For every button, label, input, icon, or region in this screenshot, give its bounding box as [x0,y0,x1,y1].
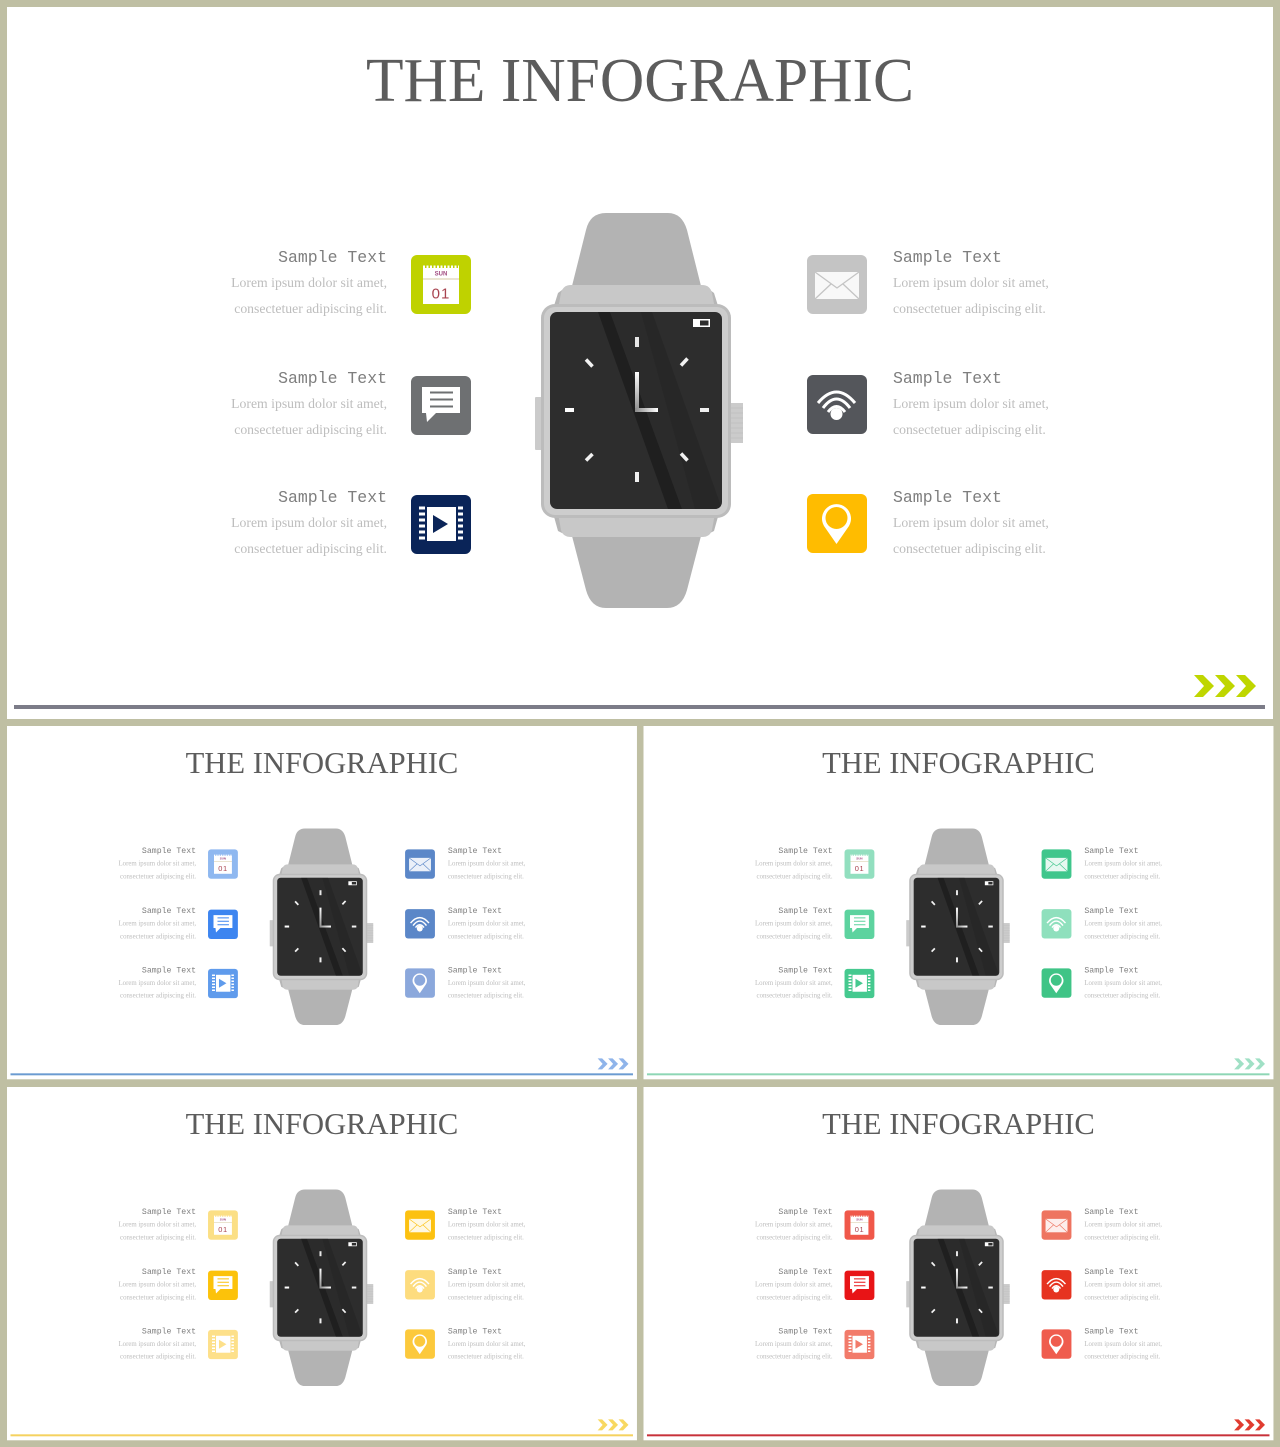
text block: right 1: consectetuer adipiscing elit. [448,873,524,880]
title: THE INFOGRAPHIC [822,746,1095,780]
text block: left 2: Sample Text [142,906,196,916]
icon: location pin [1042,968,1071,998]
text block: right 1 [1084,1207,1162,1241]
text block: right 2: Lorem ipsum dolor sit amet, [448,1282,526,1289]
icon: calendar: 01 [855,1225,864,1234]
icon: video [208,1330,238,1359]
text block: left 1: Lorem ipsum dolor sit amet, [119,860,196,867]
text block: right 2 [1084,906,1162,940]
smartwatch [270,1190,373,1386]
text block: left 2: Sample Text [278,369,387,388]
text block: right 2: Lorem ipsum dolor sit amet, [1084,921,1162,928]
text block: left 3: Lorem ipsum dolor sit amet, [119,1341,196,1348]
icon: video [208,969,238,998]
title: THE INFOGRAPHIC [186,746,458,780]
smartwatch [270,829,373,1025]
text block: right 2: consectetuer adipiscing elit. [448,1294,524,1301]
text block: left 1: Lorem ipsum dolor sit amet, [755,860,833,867]
text block: left 1: consectetuer adipiscing elit. [120,1234,196,1241]
text block: right 2 [448,1267,526,1301]
text block: right 3: Sample Text [893,488,1002,507]
panel: blue variant [7,726,637,1079]
text block: right 3 [893,488,1049,556]
text block: left 2: consectetuer adipiscing elit. [234,422,387,437]
text block: right 2: consectetuer adipiscing elit. [893,422,1046,437]
icon: speech bubble [845,910,874,939]
text block: left 3 [231,488,387,556]
text block: right 3: consectetuer adipiscing elit. [448,993,524,1000]
text block: left 2: Lorem ipsum dolor sit amet, [755,1282,833,1289]
arrows: chevrons [1194,675,1256,697]
icon: calendar: 01 [855,864,864,873]
text block: left 2: Sample Text [142,1267,196,1277]
arrows: chevrons [1234,1419,1265,1430]
text block: left 3 [119,1326,196,1361]
text block: right 2: Sample Text [893,369,1002,388]
text block: left 1: Sample Text [142,846,196,856]
text block: right 3: consectetuer adipiscing elit. [893,541,1046,556]
text block: right 3: Sample Text [1084,1326,1139,1336]
text block: left 1 [231,248,387,316]
icon: video [845,1330,874,1359]
text block: right 3 [448,965,526,1000]
text block: right 1: Lorem ipsum dolor sit amet, [893,275,1049,290]
text block: left 1: consectetuer adipiscing elit. [757,1234,833,1241]
text block: left 2 [119,1267,196,1301]
text block: right 2: Lorem ipsum dolor sit amet, [893,396,1049,411]
icon: wifi [1042,909,1071,938]
text block: left 2: consectetuer adipiscing elit. [120,933,196,940]
text block: right 2 [448,906,526,940]
text block: left 3: Lorem ipsum dolor sit amet, [119,980,196,987]
icon: location pin [405,1329,435,1359]
title: THE INFOGRAPHIC [366,47,914,115]
text block: left 1: Sample Text [778,1207,833,1217]
text block: left 3: consectetuer adipiscing elit. [757,993,833,1000]
text block: right 1 [1084,846,1162,880]
text block: left 1: Sample Text [142,1207,196,1217]
text block: right 1 [893,248,1049,316]
text block: right 2: Lorem ipsum dolor sit amet, [1084,1282,1162,1289]
text block: left 2: consectetuer adipiscing elit. [757,1294,833,1301]
text block: right 3: Sample Text [448,1326,502,1336]
arrows: chevrons [598,1419,629,1430]
icon: envelope [807,255,867,314]
text block: left 1 [755,1207,833,1241]
icon: calendar [845,1210,874,1240]
text block: left 2: Lorem ipsum dolor sit amet, [119,1282,196,1289]
text block: left 1 [119,1207,196,1241]
text block: left 2: Sample Text [778,906,833,916]
text block: left 1: consectetuer adipiscing elit. [234,301,387,316]
text block: right 1: consectetuer adipiscing elit. [1084,1234,1161,1241]
text block: left 2 [119,906,196,940]
text block: left 3: Sample Text [278,488,387,507]
icon: calendar: SUN [435,272,447,278]
text block: left 2: Lorem ipsum dolor sit amet, [119,921,196,928]
text block: left 1: Sample Text [778,846,833,856]
text block: left 1 [755,846,833,880]
title: THE INFOGRAPHIC [822,1107,1095,1141]
text block: left 3: Lorem ipsum dolor sit amet, [231,515,387,530]
text block: right 1 [448,846,526,880]
text block: left 3: consectetuer adipiscing elit. [120,993,196,1000]
text block: right 1: Lorem ipsum dolor sit amet, [1084,1221,1162,1228]
text block: right 2: consectetuer adipiscing elit. [1084,933,1161,940]
text block: right 2 [1084,1267,1162,1301]
text block: left 3: Lorem ipsum dolor sit amet, [755,1341,833,1348]
icon: calendar: 01 [218,1225,228,1234]
text block: right 1: consectetuer adipiscing elit. [1084,873,1161,880]
text block: right 3 [1084,1326,1162,1361]
text block: right 2: Lorem ipsum dolor sit amet, [448,921,526,928]
text block: right 1: consectetuer adipiscing elit. [448,1234,524,1241]
text block: right 3 [448,1326,526,1361]
text block: left 3 [755,1326,833,1361]
text block: left 1 [119,846,196,880]
text block: left 3: Sample Text [142,1326,196,1336]
text block: right 3: Lorem ipsum dolor sit amet, [448,980,526,987]
icon: wifi [1042,1270,1071,1299]
panel: yellow variant [7,1087,637,1440]
text block: right 1: Sample Text [893,248,1002,267]
smartwatch [906,1190,1010,1386]
text block: right 3: Lorem ipsum dolor sit amet, [1084,980,1162,987]
text block: right 2: Sample Text [1084,1267,1139,1277]
text block: left 1: consectetuer adipiscing elit. [757,873,833,880]
icon: location pin [807,494,867,553]
text block: left 2 [231,369,387,437]
icon: speech bubble [411,376,471,435]
icon: speech bubble [208,1271,238,1300]
text block: left 2: consectetuer adipiscing elit. [120,1294,196,1301]
text block: right 2: Sample Text [448,906,502,916]
text block: right 1: Sample Text [448,1207,502,1217]
text block: right 3: Sample Text [1084,965,1139,975]
text block: right 1: Lorem ipsum dolor sit amet, [448,860,526,867]
text block: right 3 [1084,965,1162,1000]
icon: calendar [208,849,238,879]
text block: right 1: Lorem ipsum dolor sit amet, [448,1221,526,1228]
text block: left 3: consectetuer adipiscing elit. [234,541,387,556]
panel: green variant [644,726,1273,1079]
icon: speech bubble [845,1271,874,1300]
icon: wifi [405,1270,435,1299]
text block: left 3: Sample Text [778,965,833,975]
text block: right 3: Lorem ipsum dolor sit amet, [893,515,1049,530]
icon: wifi [807,375,867,434]
text block: right 1: Sample Text [448,846,502,856]
icon: calendar: SUN [220,857,226,861]
text block: left 2 [755,906,833,940]
arrows: chevrons [1234,1058,1265,1069]
icon: calendar: 01 [218,864,228,873]
text block: left 2: Lorem ipsum dolor sit amet, [755,921,833,928]
icon: envelope [1042,849,1071,879]
icon: calendar [411,255,471,314]
text block: left 2: Lorem ipsum dolor sit amet, [231,396,387,411]
text block: right 1 [448,1207,526,1241]
icon: envelope [405,849,435,879]
text block: right 3: consectetuer adipiscing elit. [448,1354,524,1361]
text block: left 3: Lorem ipsum dolor sit amet, [755,980,833,987]
text block: right 2 [893,369,1049,437]
smartwatch [906,829,1010,1025]
icon: calendar: SUN [856,857,863,861]
text block: left 2 [755,1267,833,1301]
text block: left 3: consectetuer adipiscing elit. [120,1354,196,1361]
text block: right 2: Sample Text [448,1267,502,1277]
text block: left 3: Sample Text [778,1326,833,1336]
text block: left 1: Lorem ipsum dolor sit amet, [231,275,387,290]
text block: left 2: consectetuer adipiscing elit. [757,933,833,940]
text block: right 1: Lorem ipsum dolor sit amet, [1084,860,1162,867]
icon: calendar: SUN [856,1218,863,1222]
icon: calendar: 01 [432,286,450,302]
text block: left 3 [119,965,196,1000]
text block: left 3: Sample Text [142,965,196,975]
icon: envelope [405,1210,435,1240]
icon: calendar [208,1210,238,1240]
icon: speech bubble [208,910,238,939]
icon: wifi [405,909,435,938]
text block: right 1: Sample Text [1084,1207,1139,1217]
text block: right 1: consectetuer adipiscing elit. [893,301,1046,316]
icon: video [411,495,471,554]
text block: left 2: Sample Text [778,1267,833,1277]
text block: right 3: consectetuer adipiscing elit. [1084,1354,1161,1361]
text block: right 2: consectetuer adipiscing elit. [448,933,524,940]
smartwatch [535,213,743,608]
text block: right 2: Sample Text [1084,906,1139,916]
panel: red variant [644,1087,1273,1440]
text block: left 1: Lorem ipsum dolor sit amet, [119,1221,196,1228]
icon: location pin [1042,1329,1071,1359]
icon: calendar [845,849,874,879]
text block: left 1: Lorem ipsum dolor sit amet, [755,1221,833,1228]
text block: right 3: Lorem ipsum dolor sit amet, [448,1341,526,1348]
icon: calendar: SUN [220,1218,226,1222]
text block: left 3: consectetuer adipiscing elit. [757,1354,833,1361]
text block: right 1: Sample Text [1084,846,1139,856]
text block: right 3: Lorem ipsum dolor sit amet, [1084,1341,1162,1348]
text block: right 3: consectetuer adipiscing elit. [1084,993,1161,1000]
text block: left 1: consectetuer adipiscing elit. [120,873,196,880]
icon: video [845,969,874,998]
arrows: chevrons [598,1058,629,1069]
icon: envelope [1042,1210,1071,1240]
panel: main slide [7,7,1273,719]
text block: right 2: consectetuer adipiscing elit. [1084,1294,1161,1301]
text block: right 3: Sample Text [448,965,502,975]
title: THE INFOGRAPHIC [186,1107,458,1141]
icon: location pin [405,968,435,998]
text block: left 1: Sample Text [278,248,387,267]
text block: left 3 [755,965,833,1000]
